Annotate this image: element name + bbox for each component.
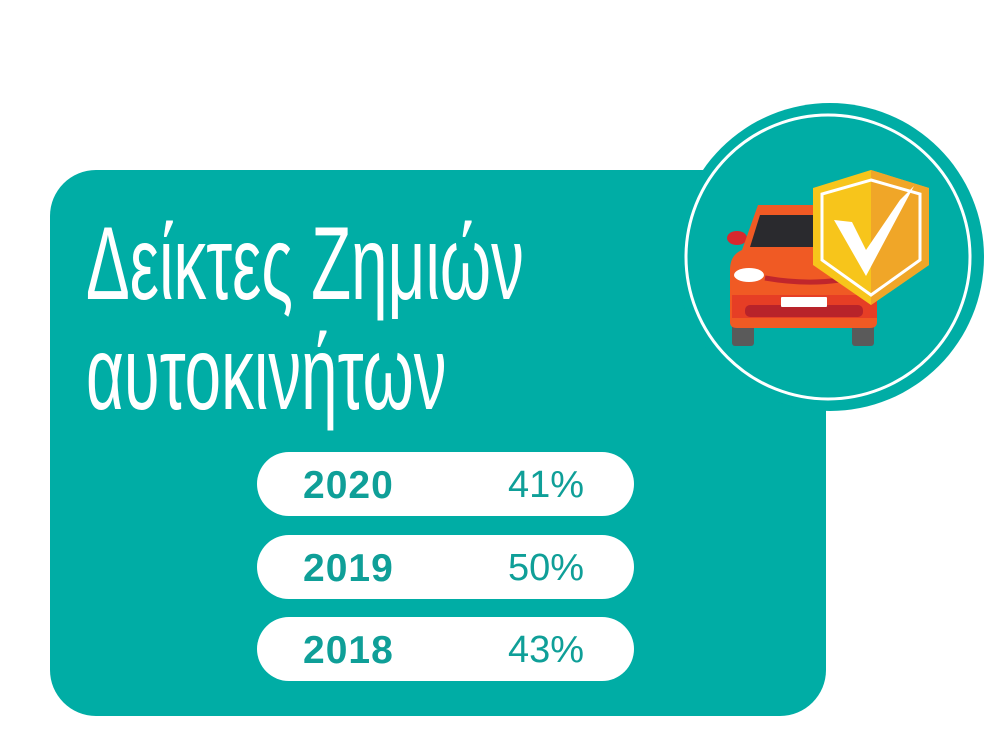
title line 2: αυτοκινήτων — [86, 316, 446, 432]
row: 2018 — [257, 617, 634, 681]
row: 2018: 43% — [508, 629, 584, 671]
car — [727, 205, 877, 346]
row: 2018: 2018 — [303, 629, 394, 672]
row: 2020 — [257, 452, 634, 516]
row: 2019: 2019 — [303, 547, 394, 590]
shield with check — [813, 170, 929, 305]
row: 2020: 2020 — [303, 464, 394, 507]
row: 2020: 41% — [508, 464, 584, 506]
row: 2019 — [257, 535, 634, 599]
row: 2019: 50% — [508, 547, 584, 589]
title line 1: Δείκτες Ζημιών — [86, 206, 524, 322]
panel: main teal card — [50, 170, 826, 716]
